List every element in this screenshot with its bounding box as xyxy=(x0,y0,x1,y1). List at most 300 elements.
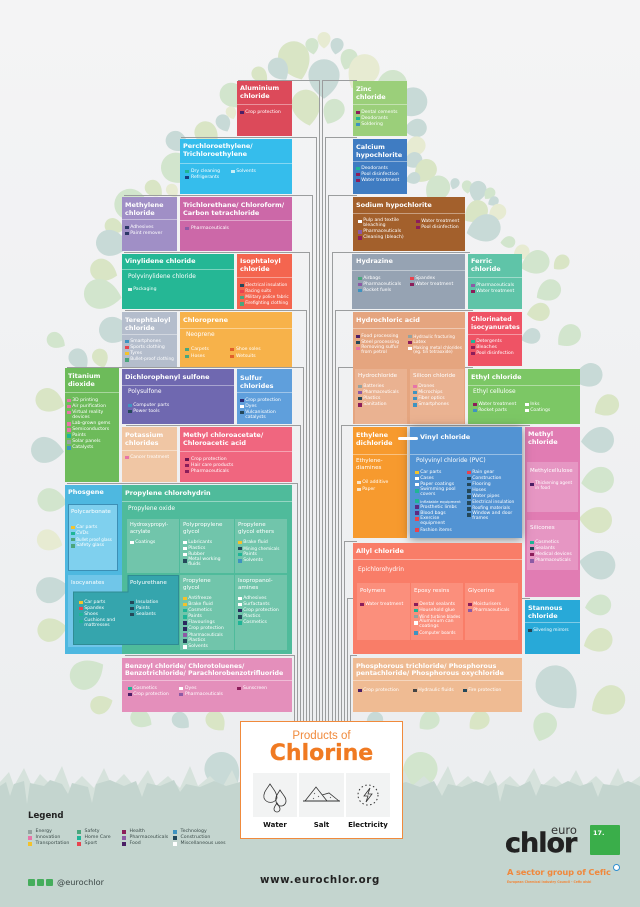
uses column 2 xyxy=(410,276,453,288)
uses column 3: Fire protection xyxy=(468,688,501,693)
heading: Calcium hypochlorite: hypochlorite xyxy=(356,151,402,159)
sub-panel: Polymers xyxy=(357,583,410,640)
uses list: Microchips xyxy=(418,390,443,395)
uses list: Firefighting clothing xyxy=(245,301,288,306)
uses list xyxy=(125,224,162,236)
uses list: Solar panels xyxy=(72,439,100,444)
uses list: Lab-grown gems xyxy=(72,421,110,426)
heading: Ethylene dichloride: dichloride xyxy=(356,439,393,447)
uses list: Cosmetics xyxy=(535,540,559,545)
sub-heading: acrylate xyxy=(130,529,150,535)
uses list: Aluminium can xyxy=(419,619,454,624)
panel: Potassium chlorides xyxy=(122,427,177,482)
uses list xyxy=(183,540,221,567)
heading: Chlorine: Chlorine xyxy=(270,741,373,766)
sub-heading: Polyurethane: Polyurethane xyxy=(130,580,167,586)
panel: Isophtaloyl chloride xyxy=(237,254,292,309)
uses list: Semiconductors xyxy=(72,427,109,432)
heading: Titanium dioxide xyxy=(68,372,100,388)
heading: Trichloroethane: Carbon tetrachloride xyxy=(183,209,259,217)
logo: eurochlor xyxy=(505,824,623,888)
sub-panel: Isocyanates xyxy=(68,575,122,647)
panel: Methyl chloride xyxy=(525,427,580,597)
heading: Vinyl chloride: Vinyl chloride xyxy=(420,433,470,441)
uses list: Wind turbine blades xyxy=(419,614,460,619)
uses column 1: Refrigerants xyxy=(191,175,219,180)
heading: Zinc chloride xyxy=(356,86,386,101)
uses column 1: from petrol xyxy=(361,350,387,354)
uses column 2 xyxy=(230,346,261,359)
uses column 1: Shoes xyxy=(84,612,98,617)
uses list xyxy=(183,596,224,649)
uses list: Deodorants xyxy=(361,116,388,121)
uses list: Cancer treatment xyxy=(130,455,169,460)
uses list: Detergents xyxy=(476,339,502,344)
uses list: Pharmaceuticals xyxy=(188,632,223,637)
uses list: Packaging xyxy=(133,287,157,292)
heading: Zinc chloride: Zinc xyxy=(356,85,371,93)
uses column 2: Window and door xyxy=(472,511,512,516)
uses column 2: Solvents xyxy=(236,169,256,174)
uses list xyxy=(413,384,449,408)
sub-heading: Polymers xyxy=(360,588,386,594)
uses column 1: Steel processing xyxy=(361,340,399,345)
uses list: Mining chemicals xyxy=(243,546,279,551)
uses list: Household glue xyxy=(419,608,455,613)
uses list: in food xyxy=(535,486,550,491)
sub-panel: Epoxy resins xyxy=(411,583,463,640)
uses list: Pharmaceuticals xyxy=(473,608,509,613)
panel: Terephtaloyl chloride xyxy=(122,312,177,367)
uses list xyxy=(238,540,280,563)
uses list: Military police fabric xyxy=(245,295,289,300)
sub-heading: Glycerine xyxy=(468,588,495,594)
logo word: euro: euro xyxy=(551,823,577,837)
label: Salt: Salt xyxy=(314,821,329,829)
panel: Vinyl chloride xyxy=(410,427,522,538)
sub-heading: Propylene xyxy=(238,522,266,528)
tile: Electricity xyxy=(346,773,390,817)
sub-heading: Hydroxypropyl- xyxy=(130,522,168,528)
panel: Phosphorous trichloride xyxy=(353,658,522,712)
icon: lightning bolt xyxy=(346,773,390,817)
uses column 1: Rocket parts xyxy=(478,408,507,413)
uses list: Adhesives xyxy=(243,596,267,601)
uses column 2: Dyes xyxy=(185,686,196,691)
uses column 2: Rain gear xyxy=(472,470,494,475)
uses list: Virtual reality xyxy=(72,410,103,415)
uses list: Paints xyxy=(243,552,257,557)
sub-heading: Silicon chloride xyxy=(413,373,455,379)
uses column 2 xyxy=(525,402,550,414)
heading: Ferric chloride: Ferric xyxy=(471,257,492,265)
uses list xyxy=(240,398,281,420)
uses list: Metal working xyxy=(188,557,221,562)
heading: Potassium chlorides xyxy=(125,431,163,447)
uses column 1: Swimming pool xyxy=(420,487,455,492)
sub-heading xyxy=(130,522,168,535)
sub-heading: amines xyxy=(238,585,258,591)
heading: Methyl chloride xyxy=(528,431,558,446)
uses column 1: Pharmaceuticals xyxy=(363,282,401,287)
heading: Benzoyl chloride: Benzoyl chloride/ Chlorotoluenes/ xyxy=(125,663,244,670)
uses list: Water treatment xyxy=(476,289,514,294)
uses column 2: Water pipes xyxy=(472,494,500,499)
uses column 2: Hydraulic fluids xyxy=(418,688,454,693)
uses list: Computer boards xyxy=(419,630,456,635)
heading: Vinylidene chloride: Vinylidene chloride xyxy=(125,257,196,265)
label: Water: Water xyxy=(263,821,287,829)
uses list xyxy=(357,480,388,493)
uses list: Paints xyxy=(72,433,86,438)
heading: Perchloroethylene xyxy=(183,142,253,158)
uses column 1: Cushions and xyxy=(84,618,115,623)
heading: Potassium chlorides: chlorides xyxy=(125,439,159,447)
logo badge: 17 xyxy=(590,825,620,855)
sub-heading xyxy=(238,522,274,535)
heading: Phosgene: Phosgene xyxy=(68,488,104,496)
heading: Methyl chloride: chloride xyxy=(528,438,558,446)
uses list: devices xyxy=(72,415,90,420)
heading: Ethyl chloride: Ethyl chloride xyxy=(471,373,522,381)
uses column 1: bleaching xyxy=(363,223,386,228)
heading: Terephtaloyl chloride: Terephtaloyl xyxy=(125,316,171,324)
uses column 2: Spandex xyxy=(415,276,435,281)
legend entries: Home Care xyxy=(84,835,111,840)
uses list: Bullet-proof clothing xyxy=(130,357,174,362)
uses list xyxy=(530,482,572,492)
panel: Ferric chloride xyxy=(468,254,522,309)
sub-heading: glycol xyxy=(183,529,199,535)
uses column 1: Exercise xyxy=(420,516,439,521)
uses column 1 xyxy=(473,402,516,414)
sub-heading: Epichlorohydrin: Epichlorohydrin xyxy=(358,567,404,573)
uses list: Vulcanisation xyxy=(245,410,276,415)
uses column 2: Wetsuits xyxy=(236,354,256,359)
uses list: Crop protection xyxy=(245,398,281,403)
heading: Benzoyl chloride: Benzotrichloride/ Parachlorobenzotrifluoride xyxy=(125,670,283,677)
sub-heading: Hydrochloride xyxy=(358,373,397,379)
legend entries: Transportation xyxy=(36,841,69,846)
legend entries: Food xyxy=(130,841,141,846)
heading: Terephtaloyl chloride: chloride xyxy=(125,324,155,332)
uses column 2 xyxy=(408,334,462,355)
uses list: CVDs xyxy=(76,531,88,536)
uses column 2: Hydraulic fracturing xyxy=(413,334,455,339)
sub-heading: Ethylene-diamines: diamines xyxy=(356,465,381,471)
heading: Aluminium chloride xyxy=(240,84,279,100)
uses list: Plastics xyxy=(363,396,380,401)
sub-heading: Silicones xyxy=(530,525,555,531)
uses list: Hair care products xyxy=(191,463,233,468)
uses column 1 xyxy=(358,276,401,294)
uses column 1: Pharmaceuticals xyxy=(363,229,401,234)
connector: ethylene dichloride to vinyl chloride xyxy=(398,437,418,440)
uses list: Pharmaceuticals xyxy=(535,558,571,563)
uses list: Drones xyxy=(418,384,434,389)
heading: Phosphorous trichloride xyxy=(356,663,504,677)
uses list: Crop protection xyxy=(243,608,279,613)
heading: Ethylene dichloride xyxy=(356,432,393,447)
sub-panel: Isopropanolamines xyxy=(235,575,287,650)
social icons xyxy=(28,879,53,886)
sub-panel: Glycerine xyxy=(465,583,518,640)
uses list: Paints xyxy=(188,614,202,619)
legend entries: Miscellaneous uses xyxy=(180,841,226,846)
heading: Chloroprene: Chloroprene xyxy=(183,316,228,324)
uses list: Crop protection xyxy=(188,626,224,631)
sub-panel: Methylcellulose xyxy=(527,462,578,512)
uses column 1: Water treatment xyxy=(478,402,516,407)
heading: Methyl chloroacetate: Chloroacetic acid xyxy=(183,439,246,447)
heading: Calcium hypochlorite: Calcium xyxy=(356,143,385,151)
sub-panel: Silicones xyxy=(527,520,578,570)
uses column 2: Latex xyxy=(413,340,426,345)
sub-heading: Polyvinylidene chloride: Polyvinylidene chloride xyxy=(128,274,196,280)
uses list: Cosmetics xyxy=(188,608,212,613)
uses column 2: Inks xyxy=(530,402,540,407)
heading: Methylene chloride xyxy=(125,201,164,217)
sub-heading: glycol ethers xyxy=(238,529,274,535)
heading: Isophtaloyl chloride: chloride xyxy=(240,265,270,273)
uses list: Solvents xyxy=(243,558,263,563)
uses list xyxy=(67,398,110,450)
sub-heading: Neoprene: Neoprene xyxy=(186,332,215,338)
uses column 1: Pulp and textile xyxy=(363,218,399,223)
uses column 1: Paper coatings xyxy=(420,482,454,487)
heading: Phosphorous trichloride: pentachloride/ Phosphorous oxychloride xyxy=(356,669,504,677)
sub-panel: Hydrochloride xyxy=(355,369,407,424)
uses column 2: Paints xyxy=(136,606,150,611)
uses list xyxy=(71,524,112,548)
heading: Calcium hypochlorite xyxy=(356,144,402,159)
heading: Dichlorophenyl sulfone: Dichlorophenyl sulfone xyxy=(125,373,210,381)
uses list: Coatings xyxy=(135,540,155,545)
uses column 2: Construction xyxy=(472,476,501,481)
uses column 1: Car parts xyxy=(420,470,441,475)
uses list: Solvents xyxy=(188,644,208,649)
uses list: Paint remover xyxy=(130,231,162,236)
legend xyxy=(28,811,233,851)
uses list: Crop protection xyxy=(191,457,227,462)
uses list: Power tools xyxy=(133,409,160,414)
heading: Perchloroethylene: Trichloroethylene xyxy=(183,150,247,158)
sub-heading: Methylcellulose xyxy=(530,468,573,474)
legend entries: Safety xyxy=(84,829,100,834)
uses list xyxy=(125,338,174,362)
uses list: Silvering mirrors xyxy=(533,628,569,633)
heading: Chlorinated isocyanurates: isocyanurates xyxy=(471,324,520,331)
heading: Stannous chloride: Stannous xyxy=(528,604,562,612)
uses column 1: Spandex xyxy=(84,606,104,611)
label: Electricity: Electricity xyxy=(348,821,388,829)
uses list: Bleaches xyxy=(476,345,497,350)
sub-panel: Propylene glycol xyxy=(180,575,234,650)
uses list: Batteries xyxy=(363,384,384,389)
uses list: Moisturisers xyxy=(473,602,501,607)
heading: Perchloroethylene: Perchloroethylene/ xyxy=(183,142,253,150)
uses list: Computer parts xyxy=(133,403,169,408)
uses column 2: Hoses xyxy=(472,488,486,493)
panel: Dichlorophenyl sulfone xyxy=(122,369,234,424)
heading: Trichloroethane xyxy=(183,201,284,217)
heading: Isophtaloyl chloride: Isophtaloyl xyxy=(240,257,281,265)
uses column 1 xyxy=(356,334,399,356)
uses column 1: mattresses xyxy=(84,622,110,628)
panel: Allyl chloride xyxy=(353,543,522,654)
uses column 2: Coatings xyxy=(530,408,550,413)
uses list: Plastics xyxy=(243,614,260,619)
logo badge: 17: 17. xyxy=(593,829,605,837)
panel: Propylene chlorohydrin xyxy=(122,485,292,654)
uses list: Sports clothing xyxy=(130,345,165,350)
uses list: Medical devices xyxy=(535,552,572,557)
small print: European Chemical Industry Council - Cefic aisbl xyxy=(507,880,591,884)
uses column 1: Cases xyxy=(420,476,434,481)
panel: Perchloroethylene xyxy=(180,139,292,194)
sub-heading: Polyvinyl chloride: Polyvinyl chloride (PVC) xyxy=(416,458,486,464)
heading: Terephtaloyl chloride xyxy=(125,316,171,332)
sub-heading xyxy=(238,578,273,591)
uses list: Plastics xyxy=(188,546,205,551)
sub-heading: glycol xyxy=(183,585,199,591)
heading: Methylene chloride: Methylene xyxy=(125,201,164,209)
logo word: chlor: chlor xyxy=(505,828,576,859)
uses column 1 xyxy=(79,600,115,628)
uses list: Rubber xyxy=(188,552,205,557)
uses list xyxy=(471,339,514,357)
uses list: Crop protection xyxy=(245,110,281,115)
social handle: @eurochlor xyxy=(57,877,104,887)
uses list: Flavourings xyxy=(188,620,215,625)
uses list: Paper xyxy=(362,487,375,492)
uses column 2: Shoe soles xyxy=(236,347,261,352)
uses column 1 xyxy=(358,219,404,241)
heading: Stannous chloride xyxy=(528,605,562,620)
uses list: Pharmaceuticals xyxy=(191,226,229,231)
uses column 2: frames xyxy=(472,516,488,521)
sub-heading: Ethylene-diamines xyxy=(356,458,383,472)
uses list xyxy=(128,402,169,414)
uses column 1: Crop protection xyxy=(363,688,399,693)
sub-heading xyxy=(183,522,222,535)
uses column 1: Food processing xyxy=(361,334,398,339)
panel: Methyl chloroacetate xyxy=(180,427,292,482)
uses column 1: Car parts xyxy=(84,600,105,605)
uses list: Pool disinfection xyxy=(476,351,514,356)
uses column 3: Sunscreen xyxy=(243,686,267,691)
uses column 1 xyxy=(415,470,461,534)
uses list: Soldering xyxy=(361,122,383,127)
panel: Ethyl chloride xyxy=(468,369,580,424)
uses list: Cosmetics xyxy=(243,620,267,625)
panel: Titanium dioxide xyxy=(65,368,119,482)
uses column 2: Making metal chlorides xyxy=(413,345,462,350)
uses list: Dyes xyxy=(245,404,257,409)
uses column 2: Insulation xyxy=(136,600,158,605)
uses list: Brake fluid xyxy=(188,602,213,607)
uses list: Pharmaceuticals xyxy=(191,469,229,474)
uses list: Water treatment xyxy=(365,602,403,607)
uses list: coatings xyxy=(419,624,439,629)
tile: Salt xyxy=(299,773,344,817)
heading: Sulfur chlorides xyxy=(240,374,274,390)
uses column 1: Rocket fuels xyxy=(363,288,391,293)
tagline: A sector group of Cefic xyxy=(507,867,611,877)
uses column 1: Airbags xyxy=(363,276,381,281)
heading: Methyl chloride: Methyl xyxy=(528,430,553,438)
website: www.eurochlor.org xyxy=(260,875,380,886)
uses list: Car parts xyxy=(76,525,97,530)
uses list xyxy=(414,602,460,636)
uses list: Adhesives xyxy=(130,225,154,230)
uses list: Oil additive xyxy=(362,480,388,485)
uses list: Deodorants xyxy=(361,166,388,171)
heading: Chlorinated isocyanurates xyxy=(471,316,520,331)
icon: salt piles xyxy=(299,773,344,817)
sub-panel: Silicon chloride xyxy=(410,369,464,424)
uses column 2: Water treatment xyxy=(421,219,459,224)
uses column 1: Blood bags xyxy=(420,511,446,516)
legend entries xyxy=(28,829,233,849)
uses list: Smartphones xyxy=(418,402,449,407)
uses list: Pharmaceuticals xyxy=(476,283,514,288)
heading: Sulfur chlorides: chlorides xyxy=(240,382,274,390)
legend entries: Sport xyxy=(84,841,97,846)
uses column 2: Pharmaceuticals xyxy=(185,692,223,697)
uses column 1: Removing sulfur xyxy=(361,345,399,350)
uses list: Catalysts xyxy=(72,445,93,450)
uses list xyxy=(356,166,399,184)
uses column 1: Cosmetics xyxy=(133,686,157,691)
panel: Phosgene xyxy=(65,485,122,654)
panel: Methylene chloride xyxy=(122,197,177,251)
uses column 2 xyxy=(467,470,514,522)
uses list xyxy=(468,602,509,614)
uses list xyxy=(185,456,234,474)
legend entries: Construction xyxy=(180,835,210,840)
uses column 1: covers xyxy=(420,492,435,497)
uses list: catalysts xyxy=(245,415,266,420)
uses column 1 xyxy=(185,168,220,180)
tile: Water xyxy=(253,773,297,817)
uses list: Pharmaceuticals xyxy=(363,390,399,395)
heading: Propylene chlorohydrin: Propylene chlorohydrin xyxy=(125,489,211,497)
sub-heading: Isopropanol- xyxy=(238,578,273,584)
uses list: Electrical insulation xyxy=(245,283,287,288)
uses column 1: Prosthetic limbs xyxy=(420,505,457,510)
sub-heading: Isocyanates: Isocyanates xyxy=(71,580,104,586)
sub-heading: Epoxy resins xyxy=(414,588,449,594)
uses list: Thickening agent xyxy=(535,481,572,486)
heading: Ferric chloride: chloride xyxy=(471,265,501,273)
uses column 2: Pool disinfection xyxy=(421,225,459,230)
heading: Ethylene dichloride: Ethylene xyxy=(356,431,388,439)
sub-heading: Ethylene-diamines: Ethylene- xyxy=(356,458,383,464)
heading: Titanium dioxide: Titanium xyxy=(68,372,100,380)
heading: Zinc chloride: chloride xyxy=(356,93,386,101)
uses column 1: Dry cleaning xyxy=(191,169,220,174)
uses column 1 xyxy=(185,346,209,359)
panel: Calcium hypochlorite xyxy=(353,139,407,194)
heading: Sulfur chlorides: Sulfur xyxy=(240,374,262,382)
heading: Ferric chloride xyxy=(471,258,501,273)
panel: Stannous chloride xyxy=(525,600,580,654)
uses list xyxy=(471,283,514,295)
panel: Products of Chlorine xyxy=(240,721,403,839)
heading: Aluminium chloride: Aluminium xyxy=(240,84,279,92)
uses column 2: Water treatment xyxy=(415,282,453,287)
